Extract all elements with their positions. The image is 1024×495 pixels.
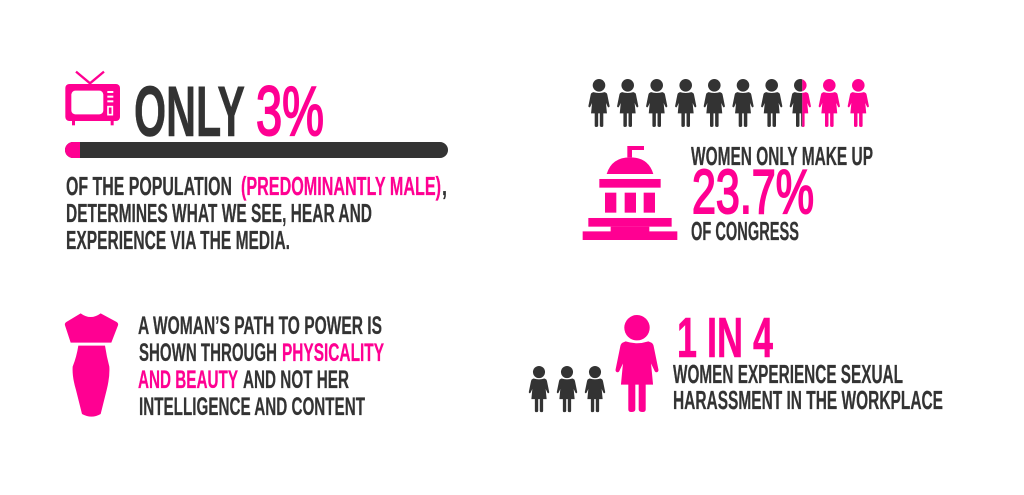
heading: only 3%: ONLY xyxy=(134,73,245,152)
text: women only make up 23.7% of congress: 23.7% xyxy=(692,158,814,227)
text: path to power: INTELLIGENCE AND CONTENT xyxy=(139,393,365,421)
panel: women in congress xyxy=(583,79,873,246)
text: women only make up 23.7% of congress: WOMEN ONLY MAKE UP xyxy=(691,141,873,171)
text: population description: (PREDOMINANTLY MALE) xyxy=(241,171,441,201)
icon: television xyxy=(65,72,120,125)
text: path to power: AND BEAUTY xyxy=(138,366,238,394)
pictogram: ten figures xyxy=(588,79,869,127)
text: 1 in 4 women xyxy=(673,306,943,415)
panel: sexual harassment xyxy=(529,306,943,415)
text: path to power xyxy=(138,312,384,421)
text: population description: OF THE POPULATION xyxy=(66,171,232,201)
text: 1 in 4 women: 1 IN 4 xyxy=(677,306,773,370)
text: path to power: PHYSICALITY xyxy=(282,339,384,367)
pictogram: three small figures xyxy=(529,366,605,412)
text: women only make up 23.7% of congress: OF CONGRESS xyxy=(691,216,799,246)
text: path to power: A WOMAN’S PATH TO POWER IS xyxy=(138,312,382,340)
panel: physicality and beauty xyxy=(65,312,384,421)
heading: only 3%: 3% xyxy=(256,72,324,150)
icon: capitol building xyxy=(583,146,677,240)
text: population description: , xyxy=(442,171,447,201)
icon: dress xyxy=(65,313,118,417)
icon: large pink figure xyxy=(616,315,658,412)
panel: media ownership xyxy=(65,72,448,255)
text: population description: DETERMINES WHAT WE SEE, HEAR AND xyxy=(66,198,372,228)
text: population description xyxy=(66,171,447,255)
text: path to power: AND NOT HER xyxy=(243,366,349,394)
text: path to power: SHOWN THROUGH xyxy=(139,339,277,367)
text: population description: EXPERIENCE VIA THE MEDIA. xyxy=(66,225,290,255)
text: women only make up 23.7% of congress xyxy=(691,141,873,246)
progress bar: 3 percent xyxy=(65,142,448,158)
